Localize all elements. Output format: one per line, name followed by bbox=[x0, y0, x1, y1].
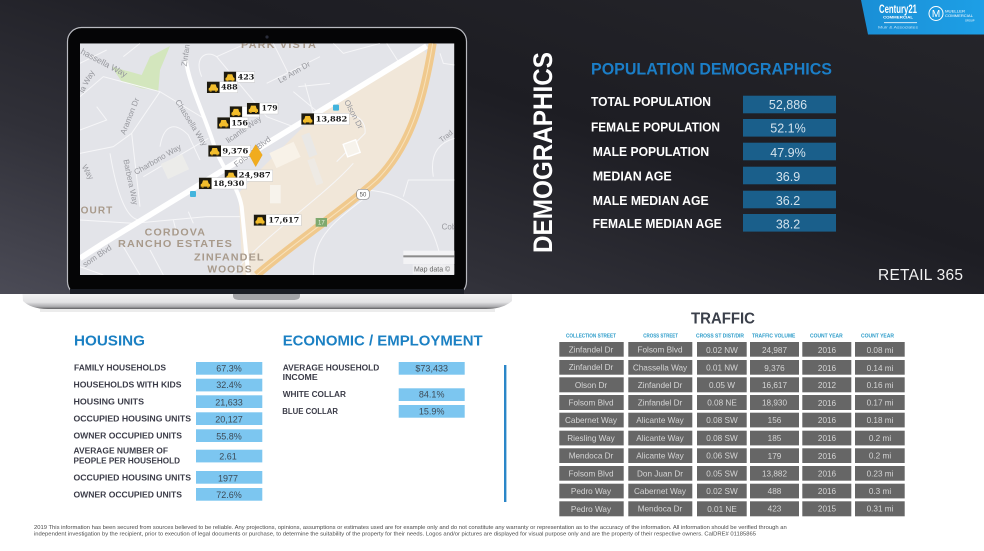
row 6: 0.2 mi bbox=[869, 434, 891, 443]
row: blue collar: BLUE COLLAR bbox=[282, 406, 339, 416]
row 3: Zinfandel Dr bbox=[638, 381, 683, 390]
scale bar and attribution bbox=[403, 251, 455, 274]
road: Folsom Blvd bbox=[80, 46, 427, 258]
traffic count: 423: 423 bbox=[238, 73, 254, 82]
row: average household income: $73,433 bbox=[415, 363, 448, 373]
row 4: Folsom Blvd bbox=[568, 398, 614, 408]
park bbox=[112, 46, 170, 91]
row: female median age: FEMALE MEDIAN AGE bbox=[593, 216, 722, 231]
vertical heading: demographics: DEMOGRAPHICS bbox=[528, 52, 558, 253]
row 5: 156 bbox=[768, 416, 782, 425]
row 2 bbox=[559, 360, 905, 375]
dark top background bbox=[0, 0, 984, 294]
row: white collar: 84.1% bbox=[419, 390, 444, 400]
table header: CROSS STREET bbox=[643, 334, 678, 340]
road: Zinfandel Dr bbox=[186, 60, 248, 275]
traffic count: 156 bbox=[217, 117, 248, 129]
row 5: 2016 bbox=[818, 416, 837, 425]
traffic count: 13,882 bbox=[301, 113, 349, 125]
row: occupied housing units 2 bbox=[74, 471, 262, 484]
map street labels: som Blvd bbox=[81, 243, 113, 269]
heading: economic employment: ECONOMIC / EMPLOYMENT bbox=[283, 333, 483, 350]
row: male population: MALE POPULATION bbox=[593, 144, 709, 159]
panel: economic table bbox=[282, 362, 465, 418]
Mueller Commercial logo: M bbox=[932, 9, 940, 20]
map street labels: ZINFANDEL bbox=[194, 253, 265, 264]
row: female median age: 38.2 bbox=[776, 218, 800, 232]
row: female median age bbox=[593, 214, 836, 232]
row: male population: 47.9% bbox=[770, 146, 806, 160]
commercial area bbox=[238, 50, 433, 275]
row 7: 179 bbox=[768, 452, 782, 461]
row: average number of people per household bbox=[74, 445, 262, 465]
row: households with kids: HOUSEHOLDS WITH KIDS bbox=[74, 379, 182, 389]
map street labels: CORDOVA bbox=[145, 227, 206, 238]
row 4: 0.17 mi bbox=[867, 398, 894, 408]
row 8: Folsom Blvd bbox=[568, 470, 614, 478]
row: total population bbox=[591, 94, 836, 113]
buildings bbox=[161, 133, 360, 203]
map street labels: Le Ann Dr bbox=[276, 59, 312, 85]
traffic count: 18,930: 18,930 bbox=[213, 179, 244, 188]
traffic count: 24,987 bbox=[225, 170, 273, 181]
row 4 bbox=[559, 395, 905, 410]
row 3: 2012 bbox=[818, 381, 837, 390]
row 5: Cabernet Way bbox=[565, 416, 618, 425]
Mueller Commercial logo: COMMERCIAL bbox=[945, 14, 973, 18]
row: median age: MEDIAN AGE bbox=[593, 168, 672, 184]
lower bezel shade bbox=[70, 289, 464, 294]
row 6: Riesling Way bbox=[567, 434, 616, 443]
row 1: Folsom Blvd bbox=[637, 346, 683, 354]
row 8: 0.05 SW bbox=[706, 470, 738, 478]
laptop base shadow bbox=[40, 309, 495, 312]
Mueller Commercial logo: MUELLER bbox=[945, 10, 965, 14]
row 10: 2015 bbox=[818, 504, 837, 514]
row 1: Zinfandel Dr bbox=[569, 346, 614, 354]
row 9: 0.3 mi bbox=[869, 487, 891, 496]
row 9 bbox=[559, 484, 905, 498]
row 10: 0.01 NE bbox=[707, 505, 737, 514]
traffic count: 488 bbox=[207, 82, 238, 93]
panel: traffic table bbox=[559, 334, 905, 516]
row 10: Mendoca Dr bbox=[638, 504, 683, 514]
row 1: 0.02 NW bbox=[706, 346, 738, 355]
row 2: Zinfandel Dr bbox=[569, 363, 614, 372]
row: family households: FAMILY HOUSEHOLDS bbox=[74, 362, 166, 372]
row: average number of people per household: AVERAGE NUMBER OF bbox=[74, 445, 168, 455]
row 6: Alicante Way bbox=[636, 434, 685, 443]
row 10 bbox=[559, 501, 905, 516]
logo banner bbox=[861, 0, 984, 34]
map street labels: Trad bbox=[437, 128, 455, 144]
row 2: Chassella Way bbox=[633, 364, 688, 372]
row 2: 9,376 bbox=[764, 364, 785, 373]
row: male population bbox=[593, 143, 836, 160]
row: owner occupied units 2: 72.6% bbox=[216, 490, 242, 500]
traffic count: 156: 156 bbox=[231, 118, 248, 127]
row: white collar bbox=[283, 388, 465, 401]
heading: population demographics: POPULATION DEMOGRAPHICS bbox=[591, 60, 832, 78]
map street labels: Charbono Way bbox=[132, 142, 183, 177]
row 7 bbox=[559, 448, 905, 463]
map street labels: Olson Dr bbox=[342, 98, 365, 131]
heading: traffic: TRAFFIC bbox=[691, 311, 755, 328]
row 1 bbox=[559, 342, 905, 357]
footer disclaimer bbox=[34, 525, 787, 538]
row 9: 2016 bbox=[818, 487, 837, 496]
row: family households bbox=[74, 362, 262, 375]
map street labels: PARK VISTA bbox=[241, 40, 317, 51]
row: white collar: WHITE COLLAR bbox=[283, 389, 347, 399]
traffic count: 9,376: 9,376 bbox=[222, 147, 248, 156]
map street labels: Folsom Blvd bbox=[232, 135, 273, 169]
table header: COUNT YEAR bbox=[861, 334, 894, 340]
row: occupied housing units bbox=[74, 412, 262, 425]
row 4: 18,930 bbox=[762, 398, 787, 408]
traffic count: 179 bbox=[247, 103, 278, 114]
highway shields and transit markers bbox=[190, 105, 369, 227]
map street labels: hassella Way bbox=[79, 46, 130, 79]
table header: COUNT YEAR bbox=[810, 334, 843, 340]
row: family households: 67.3% bbox=[216, 364, 242, 374]
row: male median age: 36.2 bbox=[776, 194, 800, 208]
map street labels: Zinfan bbox=[180, 44, 192, 67]
traffic count: 179: 179 bbox=[262, 104, 278, 113]
row 6: 2016 bbox=[818, 434, 837, 443]
row: female population bbox=[591, 119, 836, 137]
Century 21 logo text: COMMERCIAL bbox=[883, 16, 914, 20]
row 3: 0.16 mi bbox=[867, 381, 894, 390]
table header: CROSS ST DIST/DIR bbox=[696, 334, 744, 340]
row 4: 0.08 NE bbox=[707, 398, 737, 408]
table header: TRAFFIC VOLUME bbox=[752, 334, 796, 340]
map street labels: OURT bbox=[81, 206, 113, 217]
row 7: 0.06 SW bbox=[706, 452, 738, 460]
row 8: Don Juan Dr bbox=[637, 470, 683, 478]
scale bar and attribution: Map data © bbox=[414, 265, 451, 273]
row: owner occupied units 2: OWNER OCCUPIED UNITS bbox=[74, 490, 182, 500]
row: median age: 36.9 bbox=[776, 170, 800, 184]
row: average household income bbox=[283, 362, 465, 382]
panel: population table bbox=[591, 94, 836, 232]
row 6: 0.08 SW bbox=[706, 434, 738, 443]
row 5: 0.18 mi bbox=[867, 416, 894, 425]
Century 21 logo text: Century21 bbox=[879, 4, 917, 16]
row 9: 0.02 SW bbox=[706, 487, 738, 496]
row: female population: FEMALE POPULATION bbox=[591, 120, 720, 135]
row 7: Alicante Way bbox=[636, 452, 685, 460]
row: male median age: MALE MEDIAN AGE bbox=[593, 193, 709, 208]
row 10: Pedro Way bbox=[571, 505, 612, 514]
row 2: 2016 bbox=[818, 364, 837, 373]
row 7: 2016 bbox=[818, 452, 837, 461]
row: total population: TOTAL POPULATION bbox=[591, 94, 711, 109]
traffic map bbox=[77, 40, 457, 275]
table header: COLLECTION STREET bbox=[566, 334, 616, 340]
map street labels: la Way bbox=[77, 69, 96, 94]
row: male median age bbox=[593, 191, 836, 208]
row 5: 0.08 SW bbox=[706, 416, 738, 425]
row: owner occupied units bbox=[74, 429, 262, 442]
laptop lid bbox=[68, 28, 466, 296]
highway 50 bbox=[257, 43, 433, 275]
brand label: retail 365: RETAIL 365 bbox=[878, 267, 963, 284]
traffic count: 24,987: 24,987 bbox=[239, 170, 271, 179]
map street labels: Aramon Dr bbox=[119, 96, 141, 136]
traffic count: 423 bbox=[224, 72, 255, 83]
row 9: Pedro Way bbox=[571, 487, 612, 496]
row 10: 0.31 mi bbox=[867, 504, 894, 514]
map street labels: licante Way bbox=[224, 114, 263, 145]
row 4: Zinfandel Dr bbox=[638, 398, 683, 408]
Mueller Commercial logo bbox=[929, 6, 975, 22]
row: households with kids: 32.4% bbox=[216, 380, 242, 390]
laptop mockup with traffic map bbox=[22, 28, 512, 312]
heading: housing: HOUSING bbox=[74, 333, 145, 350]
row 8 bbox=[559, 466, 905, 481]
row 3: 16,617 bbox=[762, 381, 787, 390]
minor streets bbox=[80, 43, 454, 275]
row 8: 0.23 mi bbox=[867, 470, 894, 478]
row: occupied housing units: 20,127 bbox=[215, 414, 243, 424]
row 8: 13,882 bbox=[762, 470, 787, 478]
traffic count: 17,617: 17,617 bbox=[268, 216, 299, 225]
row: median age bbox=[593, 167, 836, 184]
row: households with kids bbox=[74, 379, 262, 391]
map street labels: Barbera Way bbox=[121, 159, 140, 206]
row: occupied housing units: OCCUPIED HOUSING UNITS bbox=[74, 414, 191, 424]
row: housing units: 21,633 bbox=[215, 397, 243, 407]
row 3 bbox=[559, 377, 905, 392]
table header bbox=[566, 334, 894, 340]
map street labels: Cob bbox=[442, 222, 457, 231]
row 7: 0.2 mi bbox=[869, 452, 891, 460]
traffic count: hidden marker bbox=[230, 106, 259, 117]
Century 21 logo text bbox=[878, 4, 918, 30]
row: total population: 52,886 bbox=[769, 98, 807, 112]
Century 21 logo text: Muir & Associates bbox=[878, 26, 918, 30]
highway shields and transit markers: 17 bbox=[318, 221, 325, 227]
row: owner occupied units: OWNER OCCUPIED UNITS bbox=[74, 431, 182, 441]
row 2: 0.14 mi bbox=[867, 364, 894, 373]
row: female population: 52.1% bbox=[770, 122, 806, 136]
row 3: Olson Dr bbox=[575, 381, 607, 390]
row 5: Alicante Way bbox=[636, 416, 685, 425]
row: blue collar bbox=[282, 405, 465, 418]
footer disclaimer: 2019 This information has been secured from sources believed to be reliable. Any projections, opinions, assumptions or estimates used are for example only and do not constitute any warranty or representation as to the accuracy of the information. All information should be verified through an bbox=[34, 525, 787, 531]
row: average household income: AVERAGE HOUSEHOLD bbox=[283, 362, 379, 372]
row: housing units bbox=[74, 395, 262, 408]
row 3: 0.05 W bbox=[709, 381, 735, 390]
traffic count: 488: 488 bbox=[221, 83, 238, 92]
row 6 bbox=[559, 431, 905, 445]
laptop notch bbox=[233, 294, 300, 300]
panel: housing table bbox=[74, 362, 262, 501]
row: blue collar: 15.9% bbox=[419, 406, 444, 416]
traffic count: 9,376 bbox=[208, 145, 251, 157]
row: average number of people per household: 2.61 bbox=[219, 452, 237, 462]
footer disclaimer: independent investigation by the recipient, prior to execution of legal documents or purchase, to determine the suitability of the property for their needs. Logos and/or pictures are displayed for visual purpose only and are the property of their respective owners. CalDRE# 01185865 bbox=[34, 532, 756, 538]
Mueller Commercial logo: GROUP bbox=[965, 18, 975, 22]
row 4: 2016 bbox=[818, 399, 837, 408]
traffic count: 18,930 bbox=[199, 178, 247, 189]
webcam bbox=[265, 35, 269, 39]
row 10: 423 bbox=[768, 504, 782, 514]
row: average number of people per household: PEOPLE PER HOUSEHOLD bbox=[74, 455, 180, 465]
map street labels: Chassella Way bbox=[173, 98, 209, 148]
row 1: 0.08 mi bbox=[867, 346, 894, 355]
traffic count: 13,882: 13,882 bbox=[316, 114, 347, 123]
row 9: Cabernet Way bbox=[634, 487, 687, 496]
row 9: 488 bbox=[768, 487, 782, 496]
laptop base bbox=[22, 294, 512, 309]
map street labels bbox=[77, 40, 457, 275]
row 8: 2016 bbox=[818, 470, 837, 478]
row 6: 185 bbox=[768, 434, 782, 443]
location pin bbox=[249, 145, 262, 167]
row 1: 24,987 bbox=[762, 346, 787, 355]
map street labels: RANCHO ESTATES bbox=[118, 239, 233, 250]
row 7: Mendoca Dr bbox=[569, 452, 614, 460]
row 1: 2016 bbox=[818, 346, 837, 355]
row: housing units: HOUSING UNITS bbox=[74, 396, 144, 406]
row: owner occupied units 2 bbox=[74, 488, 262, 501]
row 2: 0.01 NW bbox=[706, 364, 738, 372]
row 5 bbox=[559, 413, 905, 427]
row: average household income: INCOME bbox=[283, 372, 318, 382]
map street labels: Way bbox=[80, 163, 96, 181]
map street labels: WOODS bbox=[207, 264, 253, 275]
highway shields and transit markers: 50 bbox=[360, 193, 367, 199]
traffic count: 17,617 bbox=[254, 215, 301, 226]
row: occupied housing units 2: OCCUPIED HOUSING UNITS bbox=[74, 472, 191, 482]
row: occupied housing units 2: 1977 bbox=[218, 474, 238, 484]
row: owner occupied units: 55.8% bbox=[216, 431, 242, 441]
